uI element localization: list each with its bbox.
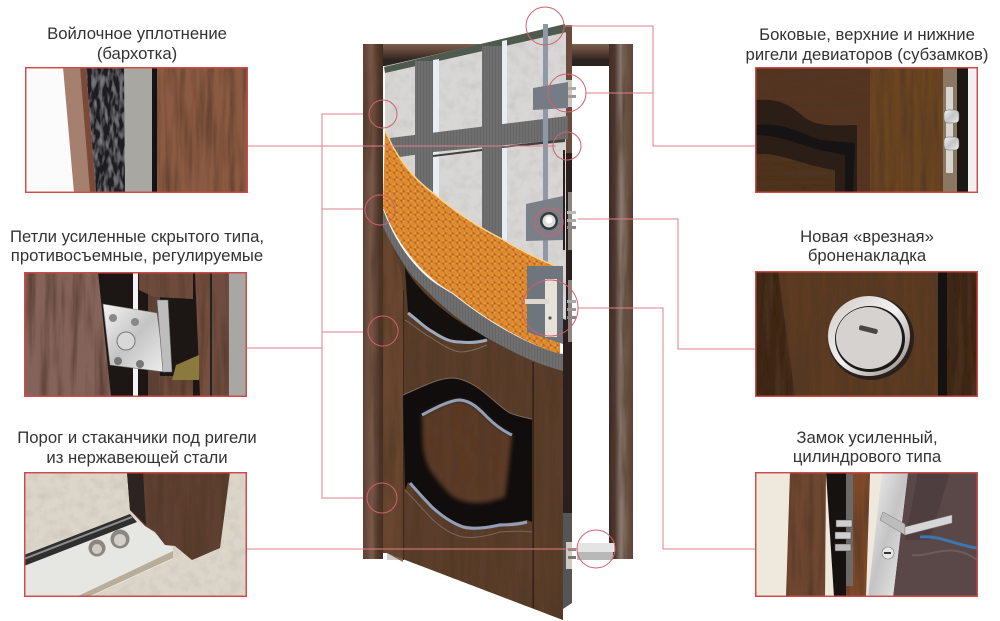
heading: hinges: противосъемные, регулируемые bbox=[11, 246, 263, 265]
gray steel sheet edge bbox=[383, 207, 563, 371]
connector lines bbox=[247, 26, 755, 549]
door edge with locks bbox=[563, 25, 576, 609]
heading: felt seal: Войлочное уплотнение bbox=[47, 24, 227, 43]
heading: threshold: из нержавеющей стали bbox=[46, 448, 228, 467]
heading: lock: Замок усиленный, bbox=[796, 428, 938, 447]
door frame bbox=[363, 44, 633, 560]
photo: threshold bbox=[24, 472, 247, 597]
photo: cylinder lock bbox=[755, 472, 978, 597]
heading: felt seal: (бархотка) bbox=[97, 44, 177, 63]
door leaf wood bbox=[383, 208, 563, 620]
orange honeycomb insulation bbox=[383, 130, 560, 354]
heading: lock: цилиндрового типа bbox=[793, 447, 942, 466]
photo: armor plate bbox=[755, 271, 978, 397]
heading: hinges: Петли усиленные скрытого типа, bbox=[10, 227, 264, 246]
heading: armor plate: Новая «врезная» bbox=[800, 227, 934, 246]
photo: hidden hinge bbox=[24, 270, 247, 397]
photo: deviator bolts bbox=[755, 67, 978, 193]
heading: deviators: Боковые, верхние и нижние bbox=[759, 25, 975, 44]
internal steel frame bbox=[384, 24, 568, 320]
heading: deviators: ригели девиаторов (субзамков) bbox=[746, 45, 988, 64]
highlight circles bbox=[365, 7, 615, 568]
lock plate and handle bbox=[525, 150, 565, 344]
heading: armor plate: броненакладка bbox=[808, 246, 927, 265]
photo: felt seal bbox=[25, 67, 248, 193]
heading: threshold: Порог и стаканчики под ригели bbox=[17, 428, 257, 447]
door illustration bbox=[363, 24, 633, 620]
decorative upper door panel bbox=[405, 268, 490, 352]
decorative lower door panel bbox=[403, 378, 532, 538]
